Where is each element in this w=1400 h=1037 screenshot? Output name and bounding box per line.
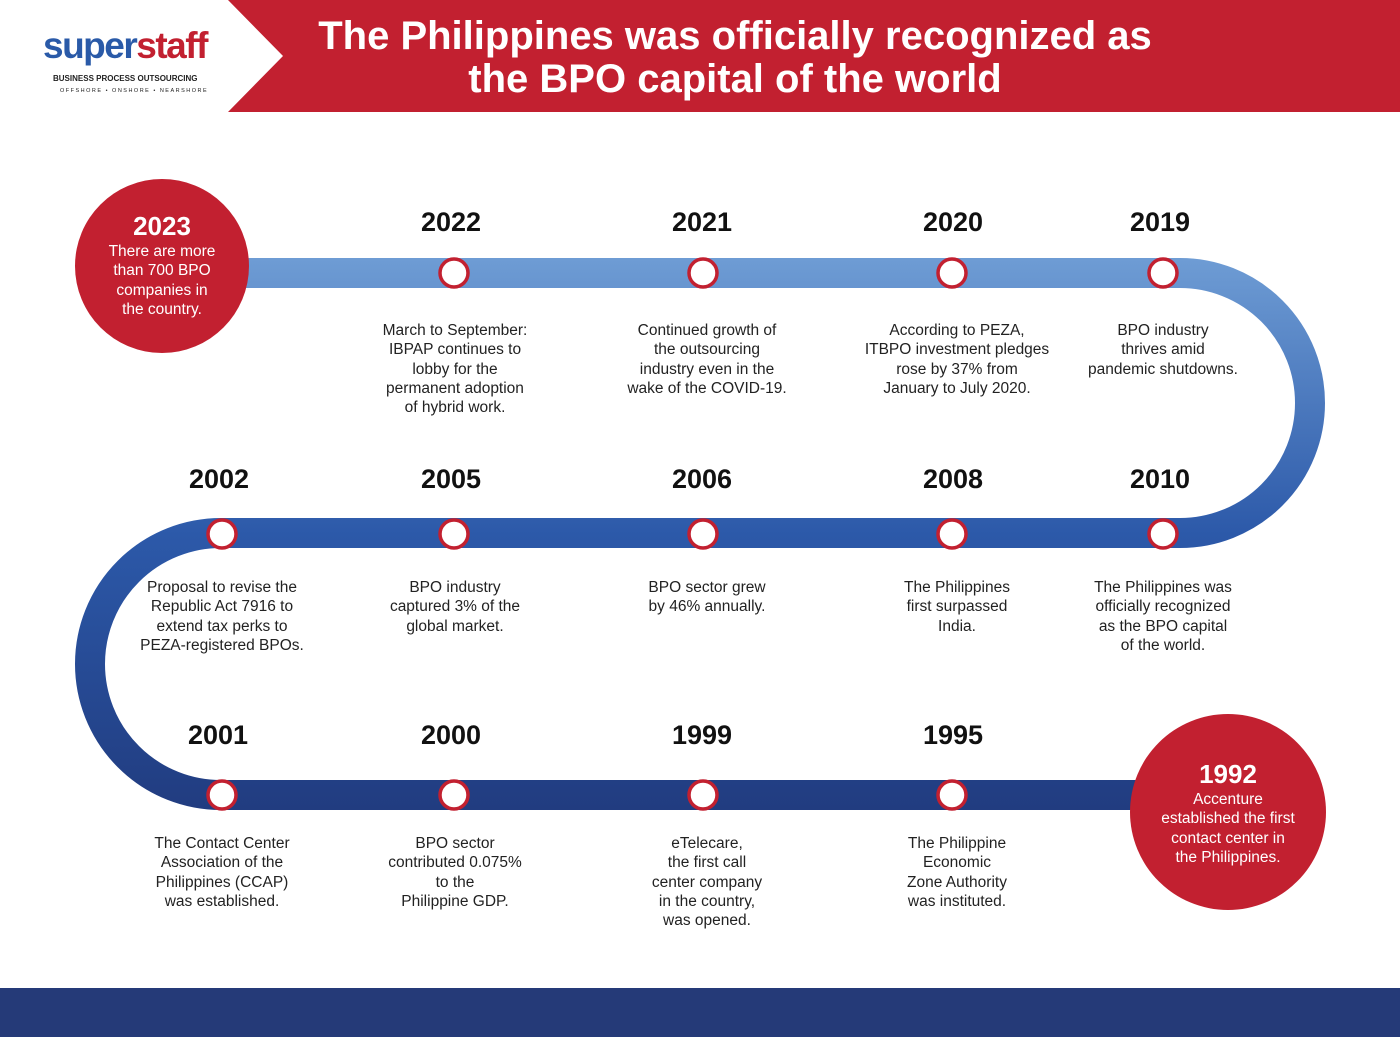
text: 2008 (923, 464, 983, 494)
text: India. (938, 618, 976, 635)
text: was instituted. (908, 893, 1006, 910)
text: Zone Authority (907, 874, 1007, 891)
texts row 2: Proposal to revise the (147, 579, 297, 596)
text: 2020 (923, 207, 983, 237)
text: Economic (923, 854, 991, 871)
callout: 1992 (1161, 759, 1295, 866)
texts row 2: extend tax perks to (157, 618, 287, 635)
text: BPO sector (415, 835, 495, 852)
text: by 46% annually. (649, 598, 765, 615)
text: to the (436, 874, 474, 891)
footer band (0, 988, 1400, 1037)
callout: 1992: the Philippines. (1175, 849, 1281, 866)
texts row 1: March to September: (383, 322, 527, 339)
texts row 3: Association of the (161, 854, 283, 871)
text: was opened. (663, 912, 751, 929)
text: of the world. (1121, 637, 1205, 654)
text: 2005 (421, 464, 481, 494)
callout: 1992: Accenture (1193, 791, 1263, 808)
texts row 1: IBPAP continues to (389, 341, 521, 358)
logo: BUSINESS PROCESS OUTSOURCING (53, 74, 197, 83)
text: The Philippines (904, 579, 1010, 596)
text: global market. (406, 618, 504, 635)
logo: superstaff (43, 25, 207, 66)
title: The Philippines was officially recognized as (318, 14, 1152, 58)
texts row 2: Republic Act 7916 to (151, 598, 293, 615)
text: wake of the COVID-19. (627, 380, 787, 397)
text: thrives amid (1121, 341, 1205, 358)
text: eTelecare, (671, 835, 743, 852)
callout: 1992: 1992 (1199, 759, 1257, 789)
text: January to July 2020. (883, 380, 1031, 397)
texts row 3 (154, 835, 290, 910)
text: 1995 (923, 720, 983, 750)
callout: 1992: established the first (1161, 810, 1295, 827)
text: pandemic shutdowns. (1088, 361, 1238, 378)
text: ITBPO investment pledges (865, 341, 1049, 358)
callout: 2023: 2023 (133, 211, 191, 241)
callout: 1992: contact center in (1171, 830, 1285, 847)
text: as the BPO capital (1099, 618, 1227, 635)
callout: 2023 (108, 211, 215, 318)
title: the BPO capital of the world (468, 57, 1002, 101)
text: in the country, (659, 893, 755, 910)
text: Continued growth of (638, 322, 776, 339)
text: 2006 (672, 464, 732, 494)
text: officially recognized (1096, 598, 1230, 615)
text: 2019 (1130, 207, 1190, 237)
text: 2021 (672, 207, 732, 237)
texts row 3: was established. (165, 893, 279, 910)
title (318, 14, 1152, 101)
texts row 1: permanent adoption (386, 380, 524, 397)
text: According to PEZA, (889, 322, 1025, 339)
callout: 2023: the country. (122, 301, 202, 318)
texts row 3: Philippines (CCAP) (156, 874, 288, 891)
text: The Philippines was (1094, 579, 1232, 596)
callout: 2023: than 700 BPO (113, 262, 211, 279)
logo: OFFSHORE • ONSHORE • NEARSHORE (60, 88, 208, 94)
text: BPO industry (1117, 322, 1209, 339)
text: captured 3% of the (390, 598, 520, 615)
text: BPO sector grew (648, 579, 766, 596)
years row 3: 2001 (188, 720, 248, 750)
text: the outsourcing (654, 341, 760, 358)
header band (43, 0, 1400, 112)
text: 1999 (672, 720, 732, 750)
texts row 2 (140, 579, 304, 654)
text: 2010 (1130, 464, 1190, 494)
texts row 1: of hybrid work. (405, 399, 505, 416)
text: rose by 37% from (896, 361, 1018, 378)
texts row 3: The Contact Center (154, 835, 290, 852)
text: first surpassed (907, 598, 1007, 615)
callout: 2023: There are more (109, 243, 215, 260)
text: 2000 (421, 720, 481, 750)
years row 2: 2002 (189, 464, 249, 494)
text: industry even in the (640, 361, 774, 378)
texts row 1: lobby for the (412, 361, 498, 378)
text: Philippine GDP. (401, 893, 509, 910)
texts row 2: PEZA-registered BPOs. (140, 637, 304, 654)
text: contributed 0.075% (388, 854, 522, 871)
text: BPO industry (409, 579, 501, 596)
text: center company (652, 874, 762, 891)
text: the first call (668, 854, 746, 871)
logo (43, 25, 208, 94)
years row 1: 2022 (421, 207, 481, 237)
callout: 2023: companies in (116, 282, 208, 299)
texts row 1 (383, 322, 527, 416)
text: The Philippine (908, 835, 1006, 852)
